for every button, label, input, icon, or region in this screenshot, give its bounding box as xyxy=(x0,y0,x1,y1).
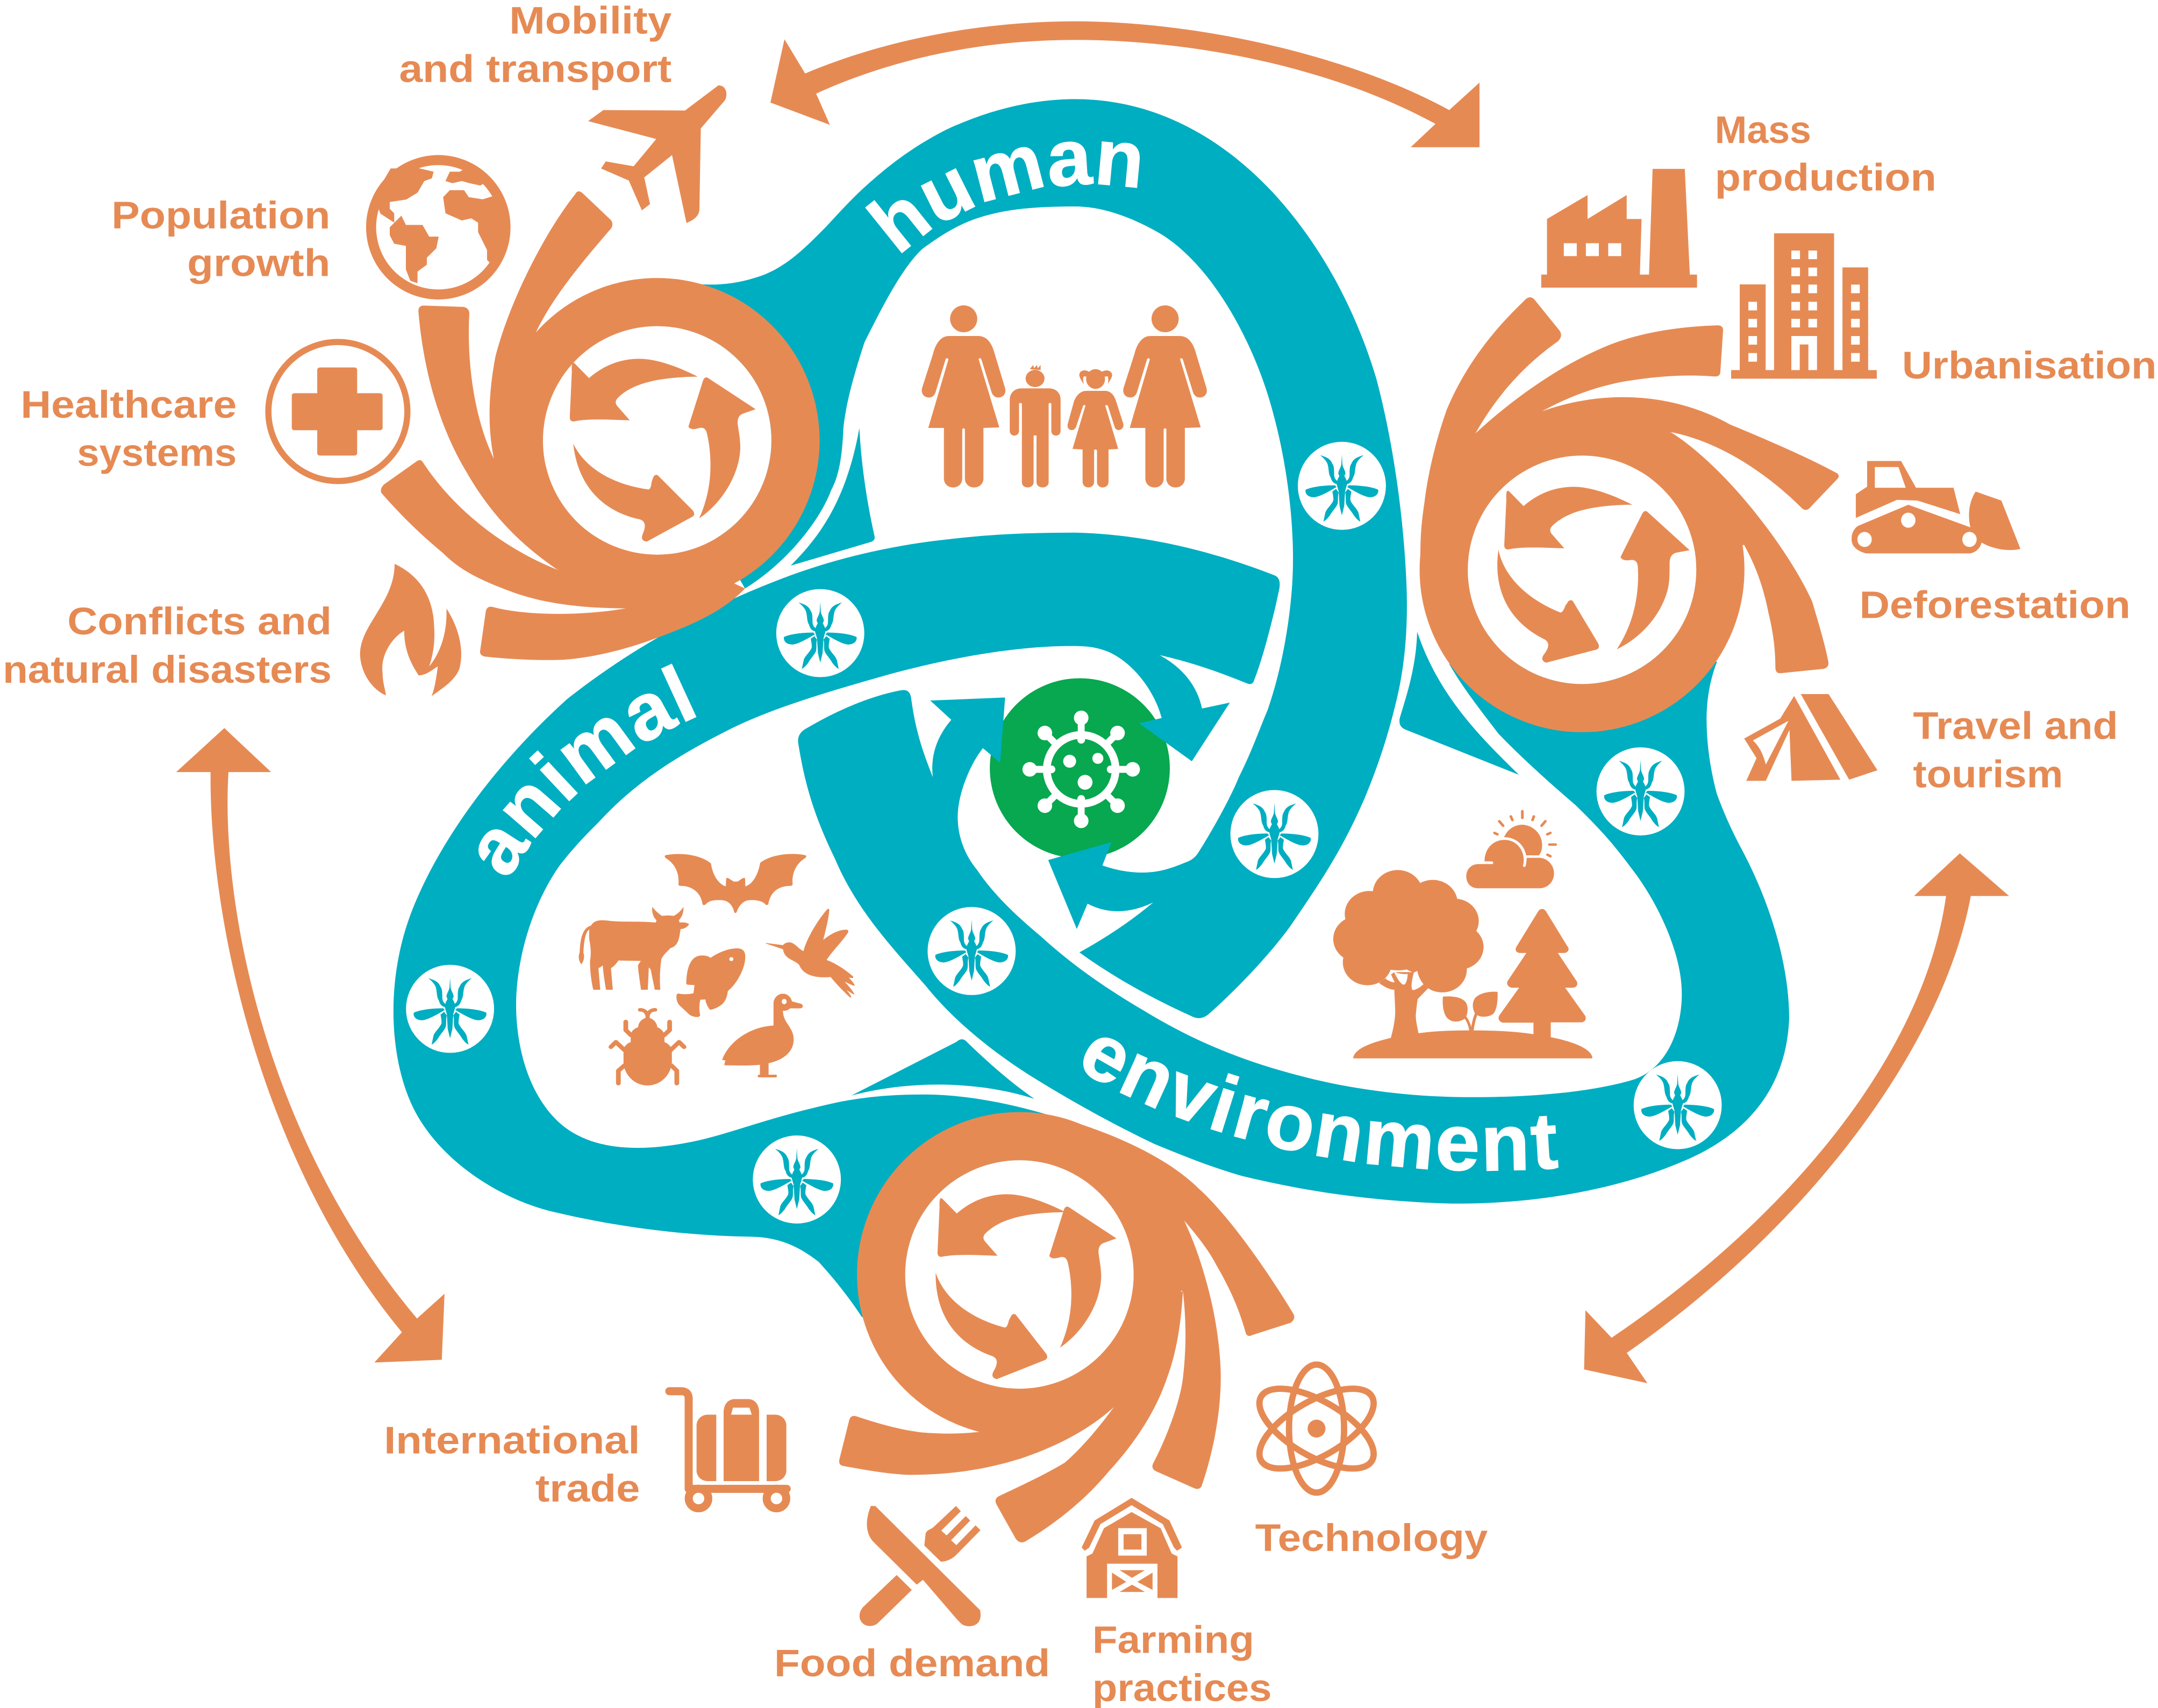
label: International trade: trade xyxy=(535,1467,640,1510)
label: Mobility and transport: Mobility xyxy=(509,0,671,42)
label: Travel and tourism xyxy=(1913,705,2118,796)
cow xyxy=(579,907,689,990)
ribbon label: human: human xyxy=(865,141,1140,254)
cloud xyxy=(1466,840,1554,888)
icon: healthcare cross xyxy=(268,342,408,481)
label: Mass production: production xyxy=(1715,156,1937,199)
label: Healthcare systems: systems xyxy=(77,432,237,475)
swirl: right xyxy=(1420,297,1839,708)
double-headed arrow: top xyxy=(770,22,1480,147)
icon: bulldozer xyxy=(1852,461,2020,553)
label: Healthcare systems xyxy=(20,383,237,475)
label: International trade: International xyxy=(384,1419,640,1462)
virus centre disc xyxy=(990,678,1170,858)
label: Mass production: Mass xyxy=(1715,109,1811,152)
fin: environment ribbon xyxy=(1399,632,1519,775)
icon: animals xyxy=(579,854,855,1085)
label: Healthcare systems: Healthcare xyxy=(20,383,237,426)
label: Conflicts and natural disasters xyxy=(3,600,332,691)
ribbon: animal xyxy=(394,533,1280,1317)
swirl: bottom xyxy=(839,1116,1295,1542)
double-headed arrow: left xyxy=(176,728,445,1362)
label: Mass production xyxy=(1715,109,1937,199)
sun xyxy=(1504,825,1542,855)
icon: family xyxy=(922,305,1207,488)
mosquito badge 7 xyxy=(753,1135,841,1224)
fin: animal ribbon xyxy=(852,1039,1034,1099)
mosquito badge 6 xyxy=(1634,1061,1721,1149)
icon: barn xyxy=(1082,1498,1182,1598)
icon: atom xyxy=(1247,1364,1386,1492)
beetle xyxy=(611,1010,684,1085)
label: Technology: Technology xyxy=(1255,1517,1488,1560)
hummingbird xyxy=(766,909,855,998)
icon: city buildings xyxy=(1731,233,1877,378)
icon: plane xyxy=(588,85,726,223)
label: Food demand: Food demand xyxy=(774,1642,1050,1685)
label: Travel and tourism: Travel and xyxy=(1913,705,2118,748)
bat xyxy=(665,854,806,913)
icon: tent xyxy=(1744,694,1877,781)
icon: globe xyxy=(366,155,511,299)
label: Travel and tourism: tourism xyxy=(1913,753,2063,796)
label: International trade xyxy=(384,1419,640,1510)
tree crown xyxy=(1333,870,1484,992)
mosquito badge 8 xyxy=(406,965,494,1053)
label: Population growth: Population xyxy=(111,194,330,237)
ribbon: human xyxy=(661,99,1407,1018)
icon: luggage trolley xyxy=(669,1391,787,1509)
label: Farming practices xyxy=(1092,1619,1271,1708)
label: Conflicts and natural disasters: Conflicts and xyxy=(67,600,332,643)
mosquito badge 5 xyxy=(927,907,1016,995)
mosquito badge 2 xyxy=(776,589,864,677)
double-headed arrow: right xyxy=(1584,853,2009,1383)
fin: human ribbon xyxy=(791,428,875,566)
icon: fire xyxy=(360,564,461,696)
label: Deforestation: Deforestation xyxy=(1859,583,2131,626)
icon: forest landscape xyxy=(1333,811,1592,1059)
sun rays xyxy=(1495,811,1555,856)
ground, pine, sprout and trunk xyxy=(1353,909,1592,1059)
mosquito badge 1 xyxy=(1298,442,1386,530)
fish xyxy=(676,948,745,1017)
ribbon: environment xyxy=(798,570,1789,1204)
label: Conflicts and natural disasters: natural disasters xyxy=(3,648,332,691)
label: Farming practices: Farming xyxy=(1092,1619,1254,1662)
label: Population growth xyxy=(111,194,330,284)
icon: factory xyxy=(1541,169,1697,288)
label: Mobility and transport: and transport xyxy=(399,47,671,90)
label: Mobility and transport xyxy=(399,0,671,90)
label: Population growth: growth xyxy=(187,241,330,284)
icon: virus xyxy=(1023,711,1140,828)
icon: knife and fork xyxy=(860,1506,981,1626)
ribbon label: animal: animal xyxy=(478,663,697,875)
label: Urbanisation: Urbanisation xyxy=(1902,344,2156,387)
duck xyxy=(722,994,803,1077)
mosquito badge 3 xyxy=(1231,790,1318,878)
swirl: left xyxy=(381,191,796,660)
mosquito badge 4 xyxy=(1597,747,1684,835)
ribbon label: environment: environment xyxy=(1083,1038,1559,1171)
